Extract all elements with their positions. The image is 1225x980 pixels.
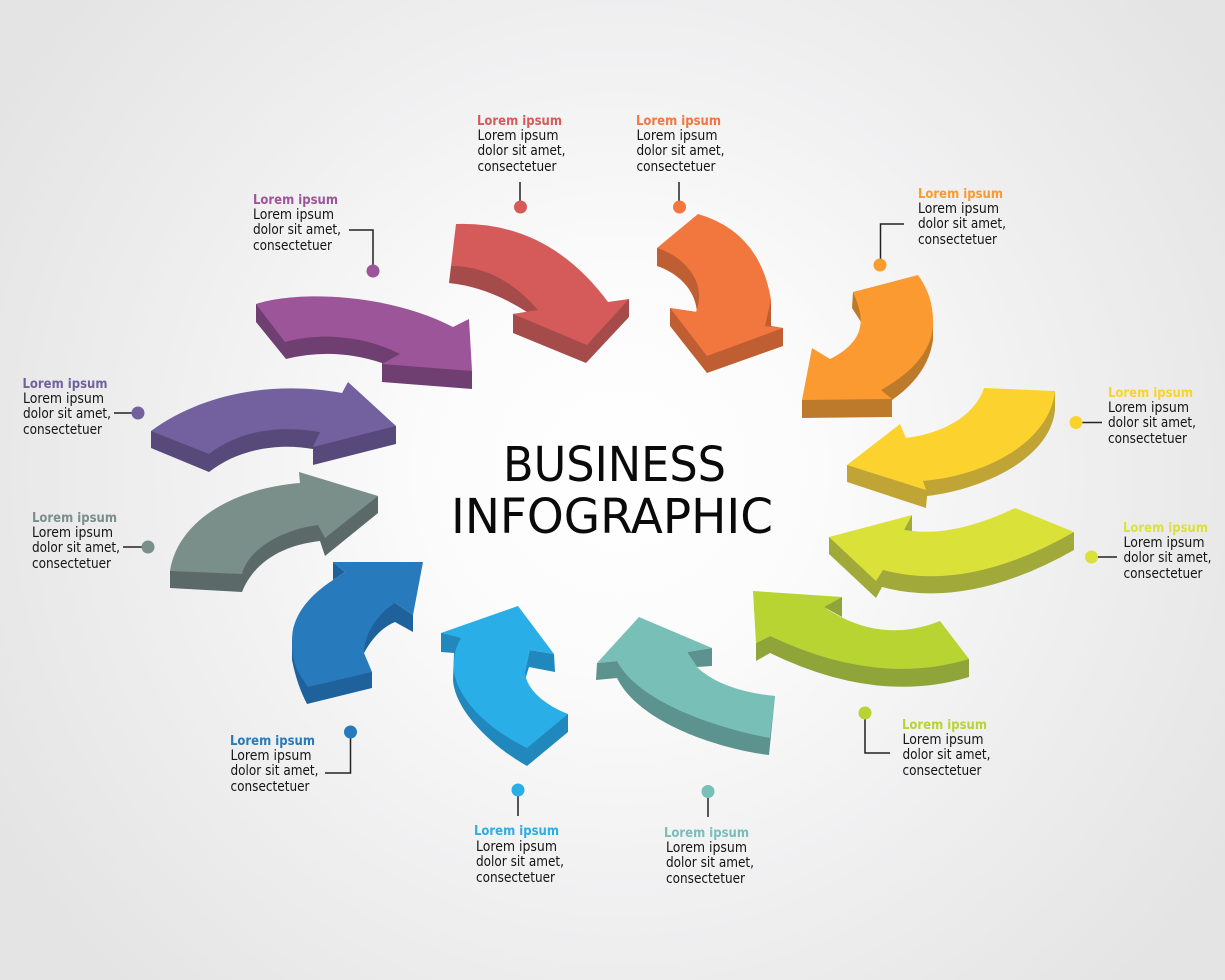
step: teal xyxy=(596,617,775,887)
label: orange xyxy=(636,113,724,175)
label: green: consectetuer xyxy=(902,763,982,779)
step: red xyxy=(449,113,629,363)
connector: green xyxy=(858,706,890,753)
connector: lime yellow xyxy=(1085,550,1117,564)
label: sky blue xyxy=(474,823,564,886)
label: sky blue: Lorem ipsum xyxy=(474,823,559,839)
arrow: green xyxy=(753,591,969,687)
step: lime yellow xyxy=(829,508,1212,598)
connector: sky blue xyxy=(512,784,524,816)
connector: orange xyxy=(673,182,686,214)
label: blue: Lorem ipsum xyxy=(230,733,315,749)
label: lime yellow xyxy=(1123,520,1212,582)
title: BUSINESS xyxy=(503,437,726,493)
label: red: dolor sit amet, xyxy=(478,143,566,159)
label: amber xyxy=(918,186,1006,248)
arrow: lime yellow xyxy=(829,508,1074,598)
title xyxy=(451,437,773,545)
label: violet: Lorem ipsum xyxy=(22,376,108,392)
label: teal: Lorem ipsum xyxy=(664,825,749,841)
arrow: orange xyxy=(657,214,783,373)
label: green: Lorem ipsum xyxy=(902,717,987,733)
label: orange: consectetuer xyxy=(636,159,716,175)
connector: red xyxy=(514,182,527,214)
label: lime yellow: Lorem ipsum xyxy=(1124,535,1204,551)
step: yellow xyxy=(847,385,1196,508)
step: blue xyxy=(230,562,423,795)
connector: yellow xyxy=(1070,416,1102,429)
label: yellow xyxy=(1108,385,1196,447)
label: violet xyxy=(22,376,111,438)
label: orange: Lorem ipsum xyxy=(636,128,718,144)
arrow: sky blue xyxy=(441,606,568,766)
label: teal xyxy=(664,825,754,887)
label: amber: Lorem ipsum xyxy=(918,186,1003,202)
label: red xyxy=(477,113,566,175)
label: gray: Lorem ipsum xyxy=(32,510,117,526)
label: red: consectetuer xyxy=(478,159,557,175)
label: blue xyxy=(230,733,318,795)
label: green: Lorem ipsum xyxy=(902,732,984,748)
arrow: gray xyxy=(170,472,378,592)
title: INFOGRAPHIC xyxy=(451,489,773,545)
label: yellow: Lorem ipsum xyxy=(1108,385,1193,401)
label: yellow: consectetuer xyxy=(1108,431,1187,447)
step: orange xyxy=(636,113,783,373)
arrow: teal xyxy=(596,617,775,755)
label: lime yellow: dolor sit amet, xyxy=(1124,550,1212,566)
label: gray xyxy=(32,510,120,572)
label: violet: Lorem ipsum xyxy=(23,391,104,407)
label: sky blue: consectetuer xyxy=(476,870,555,886)
label: red: Lorem ipsum xyxy=(477,113,562,129)
label: lime yellow: consectetuer xyxy=(1124,566,1203,582)
label: orange: dolor sit amet, xyxy=(636,143,724,159)
label: gray: Lorem ipsum xyxy=(32,525,113,541)
connector: magenta xyxy=(349,230,380,278)
arrow: violet xyxy=(151,382,396,472)
step: amber xyxy=(802,186,1006,418)
arrow: magenta xyxy=(256,296,472,389)
label: magenta: consectetuer xyxy=(253,238,332,254)
label: sky blue: dolor sit amet, xyxy=(476,854,564,870)
label: magenta: Lorem ipsum xyxy=(253,207,334,223)
label: blue: consectetuer xyxy=(230,779,310,795)
label: blue: dolor sit amet, xyxy=(230,763,318,779)
label: magenta: dolor sit amet, xyxy=(253,222,341,238)
step: sky blue xyxy=(441,606,568,886)
label: blue: Lorem ipsum xyxy=(230,748,312,764)
step: magenta xyxy=(253,192,472,389)
label: amber: consectetuer xyxy=(918,232,997,248)
label: gray: dolor sit amet, xyxy=(32,540,120,556)
arrow: red xyxy=(449,224,629,363)
arrow: blue xyxy=(292,562,423,704)
label: orange: Lorem ipsum xyxy=(636,113,721,129)
label: red: Lorem ipsum xyxy=(478,128,558,144)
label: yellow: dolor sit amet, xyxy=(1108,415,1196,431)
label: sky blue: Lorem ipsum xyxy=(476,839,557,855)
label: amber: dolor sit amet, xyxy=(918,216,1006,232)
connector: violet xyxy=(114,406,144,420)
step: gray xyxy=(32,472,378,592)
label: gray: consectetuer xyxy=(32,556,111,572)
connector: gray xyxy=(123,540,154,554)
label: violet: dolor sit amet, xyxy=(23,406,111,422)
label: green: dolor sit amet, xyxy=(902,747,990,763)
arrow: yellow xyxy=(847,388,1055,508)
label: lime yellow: Lorem ipsum xyxy=(1123,520,1208,536)
label: teal: consectetuer xyxy=(666,871,745,887)
step: green xyxy=(753,591,990,779)
step: violet xyxy=(22,376,396,472)
connector: teal xyxy=(702,785,714,817)
label: violet: consectetuer xyxy=(23,422,102,438)
label: teal: dolor sit amet, xyxy=(666,855,754,871)
label: magenta: Lorem ipsum xyxy=(253,192,338,208)
connector: amber xyxy=(874,224,904,272)
label: magenta xyxy=(253,192,341,254)
arrow: amber xyxy=(802,275,933,418)
label: yellow: Lorem ipsum xyxy=(1108,400,1189,416)
label: green xyxy=(902,717,990,779)
label: teal: Lorem ipsum xyxy=(666,840,747,856)
label: amber: Lorem ipsum xyxy=(918,201,999,217)
connector: blue xyxy=(325,726,357,773)
